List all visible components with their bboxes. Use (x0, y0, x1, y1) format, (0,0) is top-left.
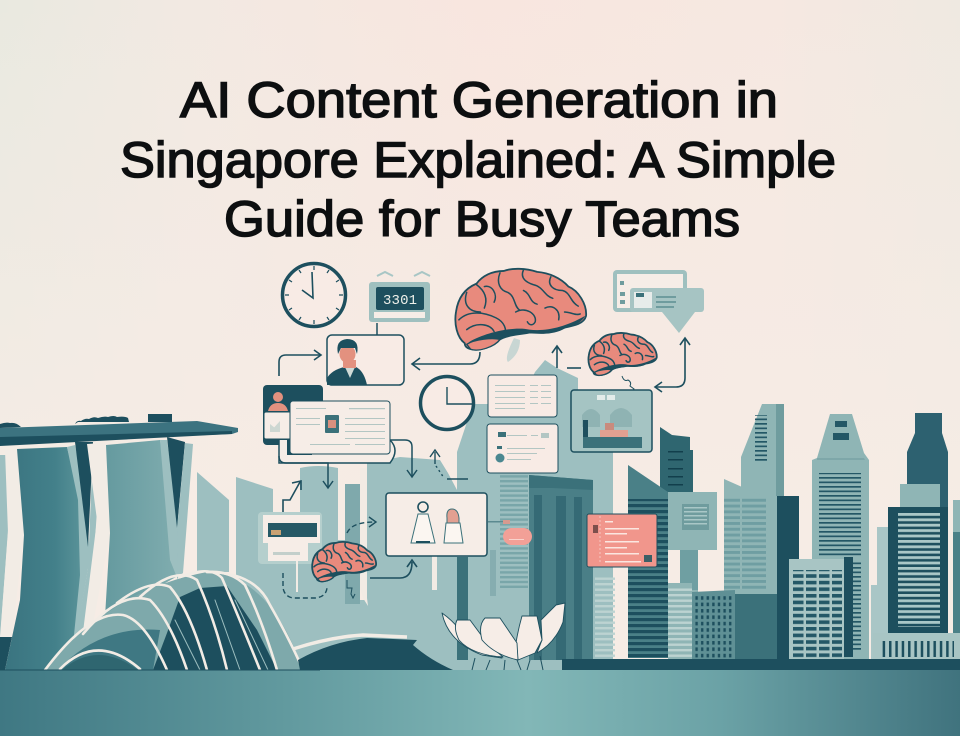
arrow: bracket down (390, 440, 417, 477)
document card: lines (488, 375, 557, 417)
central city mass (197, 360, 615, 670)
person video card (327, 335, 404, 385)
bay mound (293, 635, 453, 670)
document card: icons (487, 424, 558, 473)
arrow: from stack down (279, 456, 333, 488)
dark profile card (263, 385, 324, 445)
low window block (789, 559, 844, 661)
medium brain (588, 333, 657, 393)
far right strip (953, 500, 960, 633)
arrow: double headed right (655, 338, 690, 392)
stacked document with bracket (279, 401, 395, 463)
arrow: brain to person card (412, 352, 480, 370)
ground and water (0, 659, 960, 736)
podium (873, 633, 960, 661)
skyline right (628, 404, 960, 661)
title: Guide for Busy Teams (224, 191, 740, 247)
window building (692, 590, 735, 659)
tall tower (812, 414, 869, 660)
Gardens by the Bay dome (45, 571, 303, 670)
document panel top right (613, 270, 704, 333)
arrow: loop to person card (279, 350, 321, 376)
connector with pink pill (488, 520, 532, 545)
arrow: small brain to center (370, 560, 417, 578)
title: Singapore Explained: A Simple (120, 132, 836, 188)
roof box (148, 414, 172, 422)
center card with figures (386, 493, 487, 556)
title: AI Content Generation in (180, 72, 778, 128)
ArtScience lotus (442, 603, 565, 670)
low slat building (668, 583, 692, 659)
title (120, 72, 836, 247)
Marina Bay Sands (0, 414, 238, 670)
digital display icon (369, 272, 430, 335)
clock large (282, 264, 346, 326)
arrow: up right (283, 481, 301, 512)
slatted mid tower (724, 479, 777, 594)
clock small (420, 376, 474, 430)
arrow: up from building (552, 346, 581, 368)
tower with shoulder (741, 404, 784, 500)
arrow: dashed to center card (347, 517, 376, 533)
arrow: dashed lower (283, 573, 327, 598)
angled slat building (628, 465, 668, 659)
digital display icon: 3301 (383, 293, 417, 309)
dark right tower (871, 413, 948, 660)
small brain (312, 542, 376, 598)
arrow: dotted up (430, 450, 468, 479)
mini screenshot card (258, 512, 322, 592)
big brain (455, 269, 586, 362)
light block (668, 492, 717, 592)
roof trees (0, 416, 129, 428)
image panel (571, 390, 652, 452)
roof deck (0, 421, 238, 443)
dark tall slab (777, 496, 799, 660)
pink document (587, 514, 657, 567)
dark strip (844, 557, 853, 657)
dark angled building (660, 427, 693, 492)
